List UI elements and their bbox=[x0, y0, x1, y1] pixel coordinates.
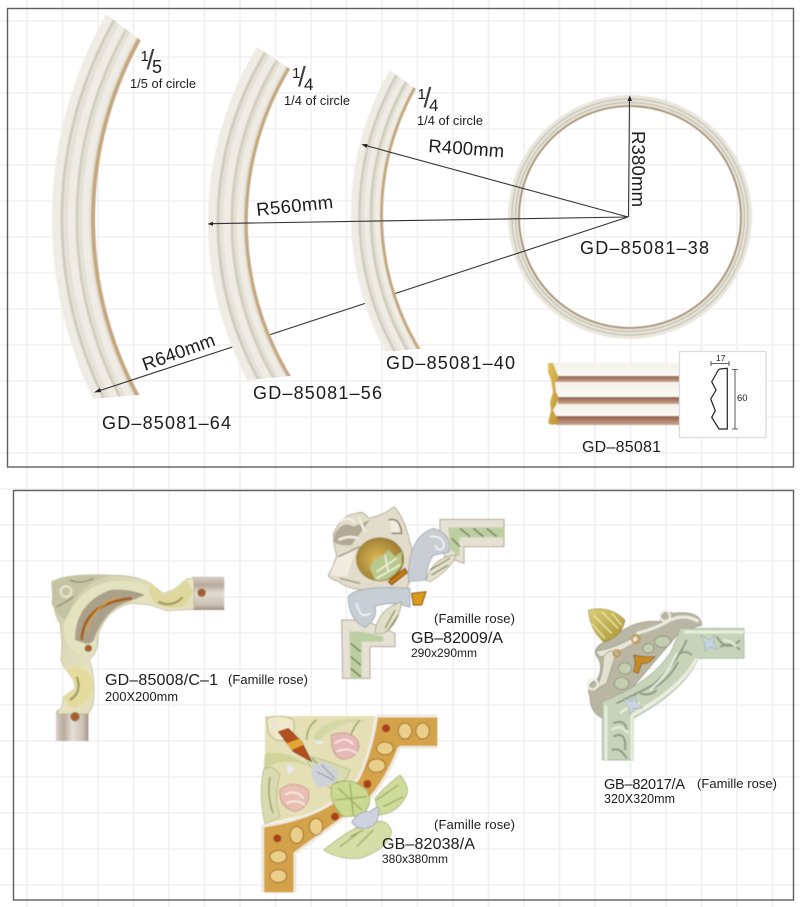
label: R560mm: R560mm bbox=[255, 191, 334, 220]
icon: corner GB-82009/A bbox=[328, 507, 504, 678]
label: GD-85081-38: GD–85081–38 bbox=[580, 238, 709, 258]
chart: cross-section profile box: 60 bbox=[737, 393, 748, 404]
icon: corner GB-82038/A bbox=[261, 716, 437, 892]
label: R640mm: R640mm bbox=[139, 329, 218, 375]
icon: corner GD-85008/C-1 bbox=[52, 575, 224, 741]
fraction: one quarter, middle arc: / bbox=[298, 61, 306, 92]
label: GD-85081-64: GD–85081–64 bbox=[102, 413, 231, 433]
fraction: one fifth bbox=[140, 44, 162, 77]
label: GB-82017/A: GB–82017/A bbox=[604, 777, 685, 793]
fraction: one quarter, middle arc: 1 bbox=[292, 65, 300, 82]
label: 200X200mm: 200X200mm bbox=[105, 689, 178, 704]
panel: corner ornaments bbox=[14, 490, 794, 900]
fraction: one quarter, small arc: 1 bbox=[418, 86, 426, 103]
label: GB-82009/A: GB–82009/A bbox=[411, 630, 503, 647]
label: famille rose, first corner: (Famille rose) bbox=[228, 672, 308, 687]
fraction: one fifth: 5 bbox=[152, 57, 162, 77]
fraction: one quarter, middle arc: 4 bbox=[304, 75, 313, 94]
label: famille rose, second corner: (Famille rose) bbox=[434, 611, 515, 626]
label: R380mm: R380mm bbox=[628, 131, 649, 207]
icon: arc moulding GD-85081-64 bbox=[52, 14, 142, 399]
fraction: one fifth: 1 bbox=[140, 48, 149, 65]
fraction: one quarter, small arc: / bbox=[424, 82, 432, 113]
icon: corner GB-82017/A bbox=[588, 609, 744, 760]
arrow: R380mm radius line bbox=[628, 96, 632, 217]
chart: cross-section profile box: 17 bbox=[716, 353, 726, 363]
fraction: one quarter, middle arc bbox=[292, 61, 313, 94]
text: 1/4 of circle, small arc: 1/4 of circle bbox=[417, 113, 483, 128]
label: GD-85081-56: GD–85081–56 bbox=[253, 383, 382, 403]
label: GB-82038/A: GB–82038/A bbox=[382, 836, 475, 853]
fraction: one quarter, small arc: 4 bbox=[429, 96, 438, 115]
label: 320X320mm: 320X320mm bbox=[604, 792, 675, 806]
label: R400mm: R400mm bbox=[428, 135, 505, 161]
icon: arc moulding GD-85081-40 bbox=[350, 70, 421, 352]
arrow: R400mm radius line bbox=[362, 144, 628, 217]
label: famille rose, fourth corner: (Famille rose) bbox=[697, 776, 777, 791]
icon: straight moulding section bbox=[548, 363, 680, 425]
fraction: one quarter, small arc bbox=[418, 82, 438, 115]
chart: cross-section profile box bbox=[680, 352, 766, 438]
arrow: R640mm radius line bbox=[94, 217, 628, 392]
label: GD-85008/C-1: GD–85008/C–1 bbox=[105, 672, 218, 689]
arrow: R560mm radius line bbox=[208, 217, 628, 226]
text: 1/5 of circle: 1/5 of circle bbox=[130, 76, 196, 91]
label: 380x380mm: 380x380mm bbox=[382, 852, 448, 866]
label: GD-85081: GD–85081 bbox=[582, 439, 661, 456]
icon: arc moulding GD-85081-56 bbox=[208, 47, 292, 380]
panel: curved mouldings bbox=[6, 8, 794, 468]
text: 1/4 of circle, middle arc: 1/4 of circle bbox=[284, 93, 350, 108]
icon: full ring moulding GD-85081-38 bbox=[512, 99, 748, 335]
label: famille rose, third corner: (Famille rose) bbox=[434, 817, 515, 832]
fraction: one fifth: / bbox=[146, 44, 154, 75]
label: 290x290mm: 290x290mm bbox=[411, 646, 477, 660]
label: GD-85081-40: GD–85081–40 bbox=[386, 353, 515, 373]
